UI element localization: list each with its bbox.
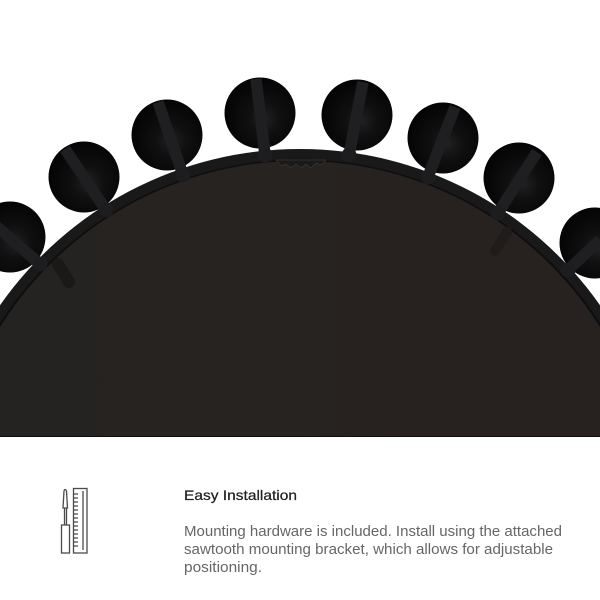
description text: positioning. [184, 560, 262, 576]
mounting straps [0, 79, 600, 270]
right sawtooth bracket [495, 232, 507, 251]
product photo: mirror back [0, 78, 600, 437]
decorative balls [0, 78, 600, 278]
strap feet [32, 148, 576, 278]
rim inner shadow band [0, 160, 600, 437]
description text: sawtooth mounting bracket, which allows for adjustable [184, 542, 553, 558]
metal frame rim [0, 149, 600, 323]
icon: mascara wand and ruler [62, 488, 87, 553]
top sawtooth seam [276, 160, 326, 168]
fabric backing [0, 161, 600, 436]
left sawtooth bracket [58, 264, 69, 282]
description text [184, 524, 562, 576]
heading: Easy Installation [184, 487, 297, 503]
description text: Mounting hardware is included. Install using the attached [184, 524, 562, 540]
